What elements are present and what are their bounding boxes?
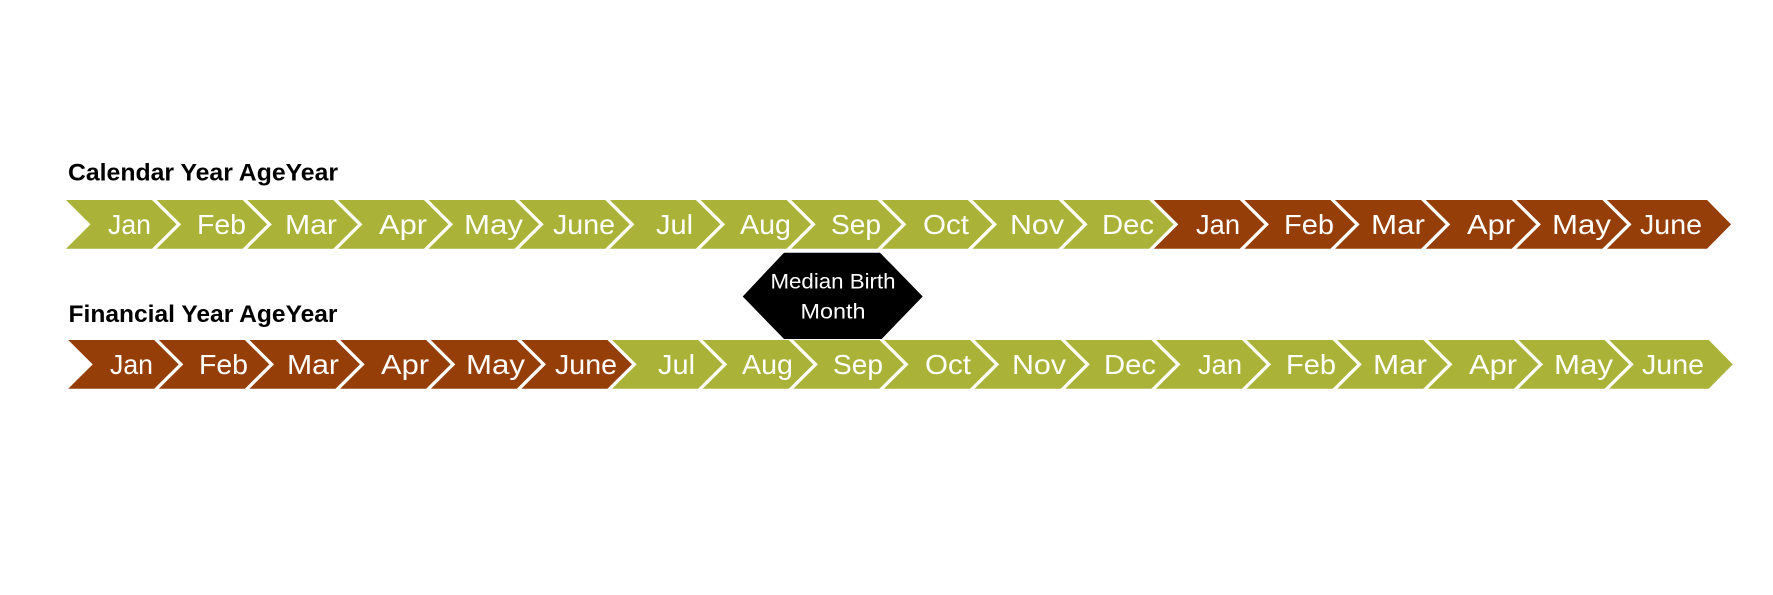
- chevron: June: [519, 200, 630, 249]
- chevron: Jan: Jan: [110, 349, 153, 380]
- chevron: Jan (next year): Jan: [1198, 349, 1242, 380]
- chevron: June (next year): [1607, 200, 1731, 249]
- chevron: Sep: Sep: [833, 349, 883, 380]
- chevron: Jul: [612, 340, 723, 389]
- chevron: Dec: Dec: [1102, 209, 1154, 240]
- chevron: Dec: [1065, 340, 1176, 389]
- chevron: May: May: [464, 209, 523, 240]
- chevron: June (next year): June: [1640, 209, 1702, 240]
- chevron: May (next year): May: [1552, 209, 1611, 240]
- chevron: Sep: [791, 200, 902, 249]
- chevron: Sep: [793, 340, 904, 389]
- chevron: Apr: Apr: [381, 349, 429, 380]
- chevron: Jul: Jul: [658, 349, 695, 380]
- chevron: May: [431, 340, 541, 389]
- chevron: Aug: [703, 340, 813, 389]
- chevron: Oct: Oct: [923, 209, 969, 240]
- chevron: Mar (next year): [1337, 340, 1448, 389]
- chevron: Oct: [884, 340, 995, 389]
- chevron: Nov: [975, 340, 1085, 389]
- chevron: June (next year): June: [1642, 349, 1704, 380]
- chevron: May: May: [466, 349, 525, 380]
- chevron: Jan: Jan: [108, 209, 151, 240]
- chevron: Aug: Aug: [740, 209, 791, 240]
- chevron: Feb (next year): [1244, 200, 1355, 249]
- callout: Median Birth Month hexagon: [743, 253, 923, 339]
- heading: Calendar Year AgeYear: Calendar Year AgeYear: [68, 160, 338, 186]
- chevron: Jan: [68, 340, 179, 389]
- chevron: Mar: Mar: [285, 209, 337, 240]
- chevron: Apr (next year): Apr: [1469, 349, 1517, 380]
- chevron: Apr (next year): Apr: [1467, 209, 1515, 240]
- chevron: Feb: [159, 340, 269, 389]
- chevron: May (next year): [1516, 200, 1627, 249]
- callout: Median Birth Month hexagon: Median Birth: [770, 270, 896, 294]
- chevron: Mar: [247, 200, 358, 249]
- chevron: June: [521, 340, 632, 389]
- chevron: June: June: [553, 209, 615, 240]
- chevron: Jan (next year): [1154, 200, 1264, 249]
- chevron: Aug: [701, 200, 811, 249]
- chevron: Mar (next year): Mar: [1371, 209, 1425, 240]
- chevron: Apr (next year): [1428, 340, 1538, 389]
- chevron: Jan (next year): [1156, 340, 1266, 389]
- chevron: Jul: [610, 200, 720, 249]
- chevron: Mar (next year): Mar: [1373, 349, 1427, 380]
- chevron: Feb (next year): [1247, 340, 1357, 389]
- chevron: Feb (next year): Feb: [1286, 349, 1336, 380]
- chevron: Jul: Jul: [656, 209, 693, 240]
- chevron: Sep: Sep: [831, 209, 881, 240]
- chevron: Feb (next year): Feb: [1284, 209, 1334, 240]
- callout: Median Birth Month hexagon: Month: [800, 300, 866, 324]
- chevron: Oct: [882, 200, 992, 249]
- chevron: Apr (next year): [1426, 200, 1536, 249]
- timeline: calendar year row: [66, 200, 1731, 249]
- chevron: May: [429, 200, 539, 249]
- chevron: Feb: Feb: [199, 349, 248, 380]
- chevron: Oct: Oct: [925, 349, 971, 380]
- chevron: Mar: Mar: [287, 349, 339, 380]
- chevron: Aug: Aug: [742, 349, 793, 380]
- chevron: Jan (next year): Jan: [1196, 209, 1240, 240]
- heading: Financial Year AgeYear: Financial Year AgeYear: [68, 301, 338, 328]
- chevron: Nov: [972, 200, 1083, 249]
- timeline: financial year row: [68, 340, 1733, 389]
- chevron: June (next year): [1609, 340, 1733, 389]
- chevron: Nov: Nov: [1012, 349, 1066, 380]
- chevron: Feb: [157, 200, 267, 249]
- chevron: Mar: [250, 340, 360, 389]
- chevron: Nov: Nov: [1010, 209, 1064, 240]
- chevron: Mar (next year): [1335, 200, 1446, 249]
- chevron: May (next year): [1519, 340, 1629, 389]
- chevron: Apr: [340, 340, 451, 389]
- chevron: Dec: [1063, 200, 1174, 249]
- chevron: June: June: [555, 349, 617, 380]
- chevron: Apr: [338, 200, 448, 249]
- chevron: Apr: Apr: [379, 209, 427, 240]
- chevron: Feb: Feb: [197, 209, 246, 240]
- chevron: Dec: Dec: [1104, 349, 1156, 380]
- chevron: Jan: [66, 200, 176, 249]
- chevron: May (next year): May: [1554, 349, 1613, 380]
